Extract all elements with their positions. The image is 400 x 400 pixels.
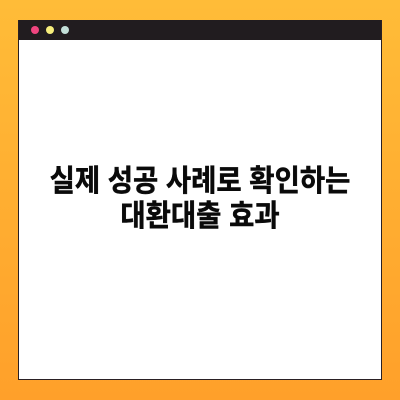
window title bar [19, 20, 381, 40]
icon: yellow dot [46, 26, 54, 34]
title: 대환대출 효과 [120, 200, 280, 233]
icon: pale blue dot [61, 26, 69, 34]
title: 실제 성공 사례로 확인하는 [50, 165, 350, 198]
icon: pink dot [31, 26, 39, 34]
title [50, 165, 350, 233]
